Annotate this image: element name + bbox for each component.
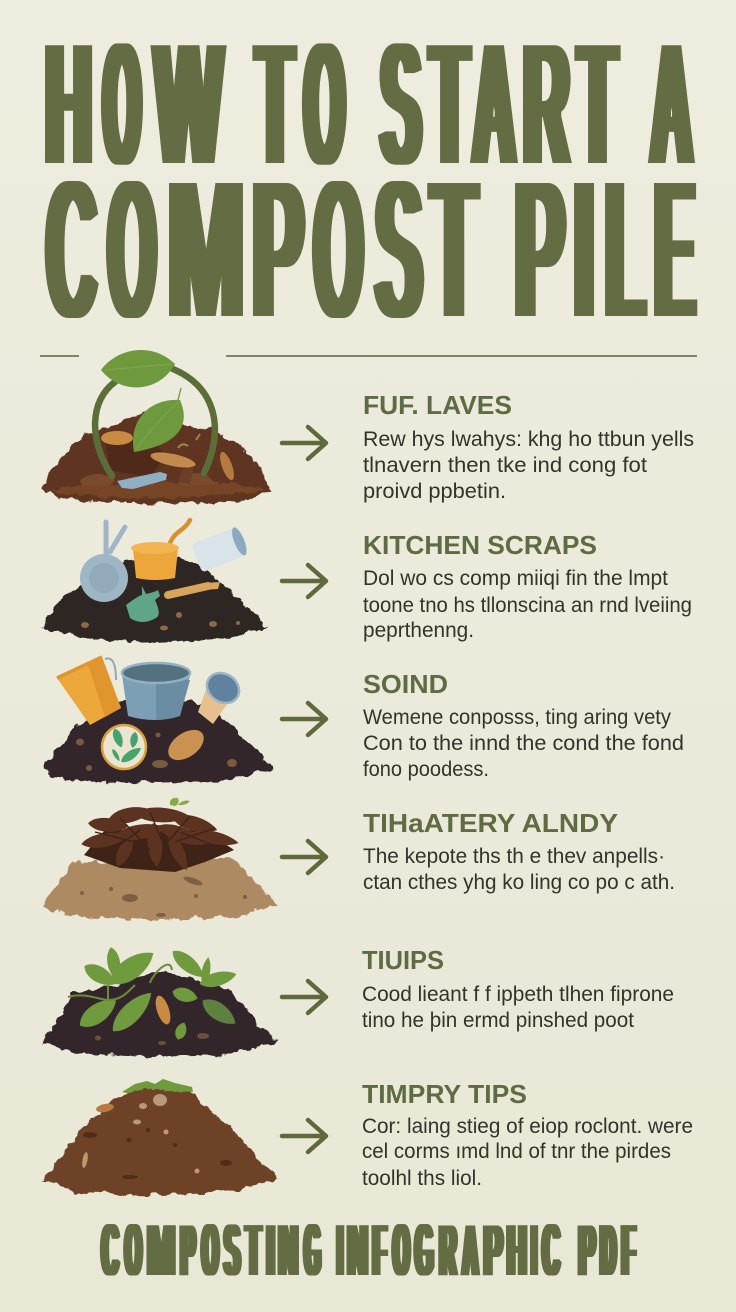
footer title: O: [202, 1209, 218, 1293]
heading: TIHaATERY ALNDY: [363, 808, 618, 838]
body: Cor: laing stieg of eiop roclont. were: [362, 1115, 693, 1138]
body: toone tno hs tllonscina an rnd lveiing: [363, 594, 692, 617]
body: [362, 983, 674, 1032]
arrow 4: [282, 841, 326, 873]
title: C: [47, 136, 96, 362]
body: Wemene conposss, ting aring vety: [363, 706, 671, 729]
title: P: [515, 136, 564, 362]
title: S: [381, 5, 421, 203]
footer title: I: [267, 1209, 274, 1293]
title: T: [431, 5, 468, 203]
heading: FUF. LAVES: [363, 390, 512, 420]
footer title: P: [484, 1209, 502, 1293]
body: Dol wo cs comp miiqi fin the lmpt: [363, 567, 668, 590]
divider: [40, 355, 697, 357]
title: [46, 5, 695, 362]
footer title: G: [415, 1209, 433, 1293]
footer title: P: [181, 1209, 195, 1293]
footer title: N: [279, 1209, 298, 1293]
text block: row 1: [363, 390, 694, 503]
title: T: [579, 5, 616, 203]
icon: brown leaves on tan soil: [42, 798, 276, 920]
heading: TIUIPS: [362, 945, 444, 975]
body: ctan cthes yhg ko ling co po c ath.: [363, 871, 675, 894]
footer title: M: [147, 1209, 175, 1293]
body: [363, 706, 684, 781]
icon: green plants on dark pile: [42, 944, 277, 1057]
title: L: [606, 136, 644, 362]
icon: leaves on brown pile: [42, 350, 273, 504]
footer title: C: [543, 1209, 560, 1293]
icon: finished compost pile: [43, 1079, 277, 1195]
body: fono poodess.: [363, 758, 489, 781]
body: [363, 567, 692, 642]
body: tlnavern then tke ind cong fot: [363, 454, 647, 477]
heading: SOIND: [363, 669, 448, 699]
title: O: [305, 5, 344, 203]
heading: TIMPRY TIPS: [362, 1079, 527, 1109]
arrow 6: [282, 1120, 326, 1152]
body: toolhl ths liol.: [362, 1167, 482, 1190]
body: peprthenng.: [363, 619, 474, 642]
footer title: I: [532, 1209, 536, 1293]
title: T: [431, 136, 476, 362]
text block: row 3: [363, 669, 684, 781]
footer title: S: [224, 1209, 240, 1293]
footer title: H: [507, 1209, 526, 1293]
title: O: [104, 5, 140, 203]
title: O: [314, 136, 363, 362]
text: F: [622, 1209, 635, 1293]
body: cel corms ımd lnd of tnr the pirdes: [362, 1140, 671, 1163]
body: tino he þin ermd pinshed poot: [362, 1009, 634, 1032]
footer title: F: [373, 1209, 386, 1293]
text block: row 6: [362, 1079, 693, 1190]
title: P: [253, 136, 303, 362]
footer title: T: [246, 1209, 261, 1293]
footer title: G: [305, 1209, 320, 1293]
text block: row 5: [362, 945, 674, 1032]
footer title: A: [463, 1209, 478, 1293]
icon: containers on dark pile: [42, 657, 273, 783]
body: [363, 845, 675, 894]
title: H: [46, 5, 91, 203]
title: A: [473, 5, 515, 203]
body: Rew hys lwahys: khg ho ttbun yells: [363, 428, 694, 451]
footer title: C: [102, 1209, 118, 1293]
body: Cood lieant f f ipþeth tlhen fiprone: [362, 983, 674, 1006]
body: proivd ppbetin.: [363, 480, 506, 503]
text block: row 4: [363, 808, 675, 894]
title: S: [375, 136, 422, 362]
heading: KITCHEN SCRAPS: [363, 530, 597, 560]
footer title: N: [348, 1209, 368, 1293]
arrow 2: [282, 565, 326, 597]
title: W: [155, 5, 222, 203]
body: [362, 1115, 693, 1190]
title: O: [108, 136, 156, 362]
body: [363, 428, 694, 503]
title: R: [524, 5, 569, 203]
arrow 1: [282, 427, 326, 459]
body: Con to the innd the cond the fond: [363, 732, 684, 755]
footer title: I: [338, 1209, 342, 1293]
arrow 3: [282, 703, 326, 735]
title: M: [168, 136, 244, 362]
footer title: D: [600, 1209, 616, 1293]
footer title: O: [393, 1209, 409, 1293]
footer title: P: [579, 1209, 595, 1293]
text block: row 2: [363, 530, 692, 642]
footer title: O: [125, 1209, 142, 1293]
arrow 5: [282, 981, 326, 1013]
icon: kitchen items on dark pile: [42, 520, 267, 643]
title: I: [574, 136, 594, 362]
body: The kepote ths th e thev anpells·: [363, 845, 665, 868]
title: T: [257, 5, 293, 203]
footer title: R: [440, 1209, 456, 1293]
